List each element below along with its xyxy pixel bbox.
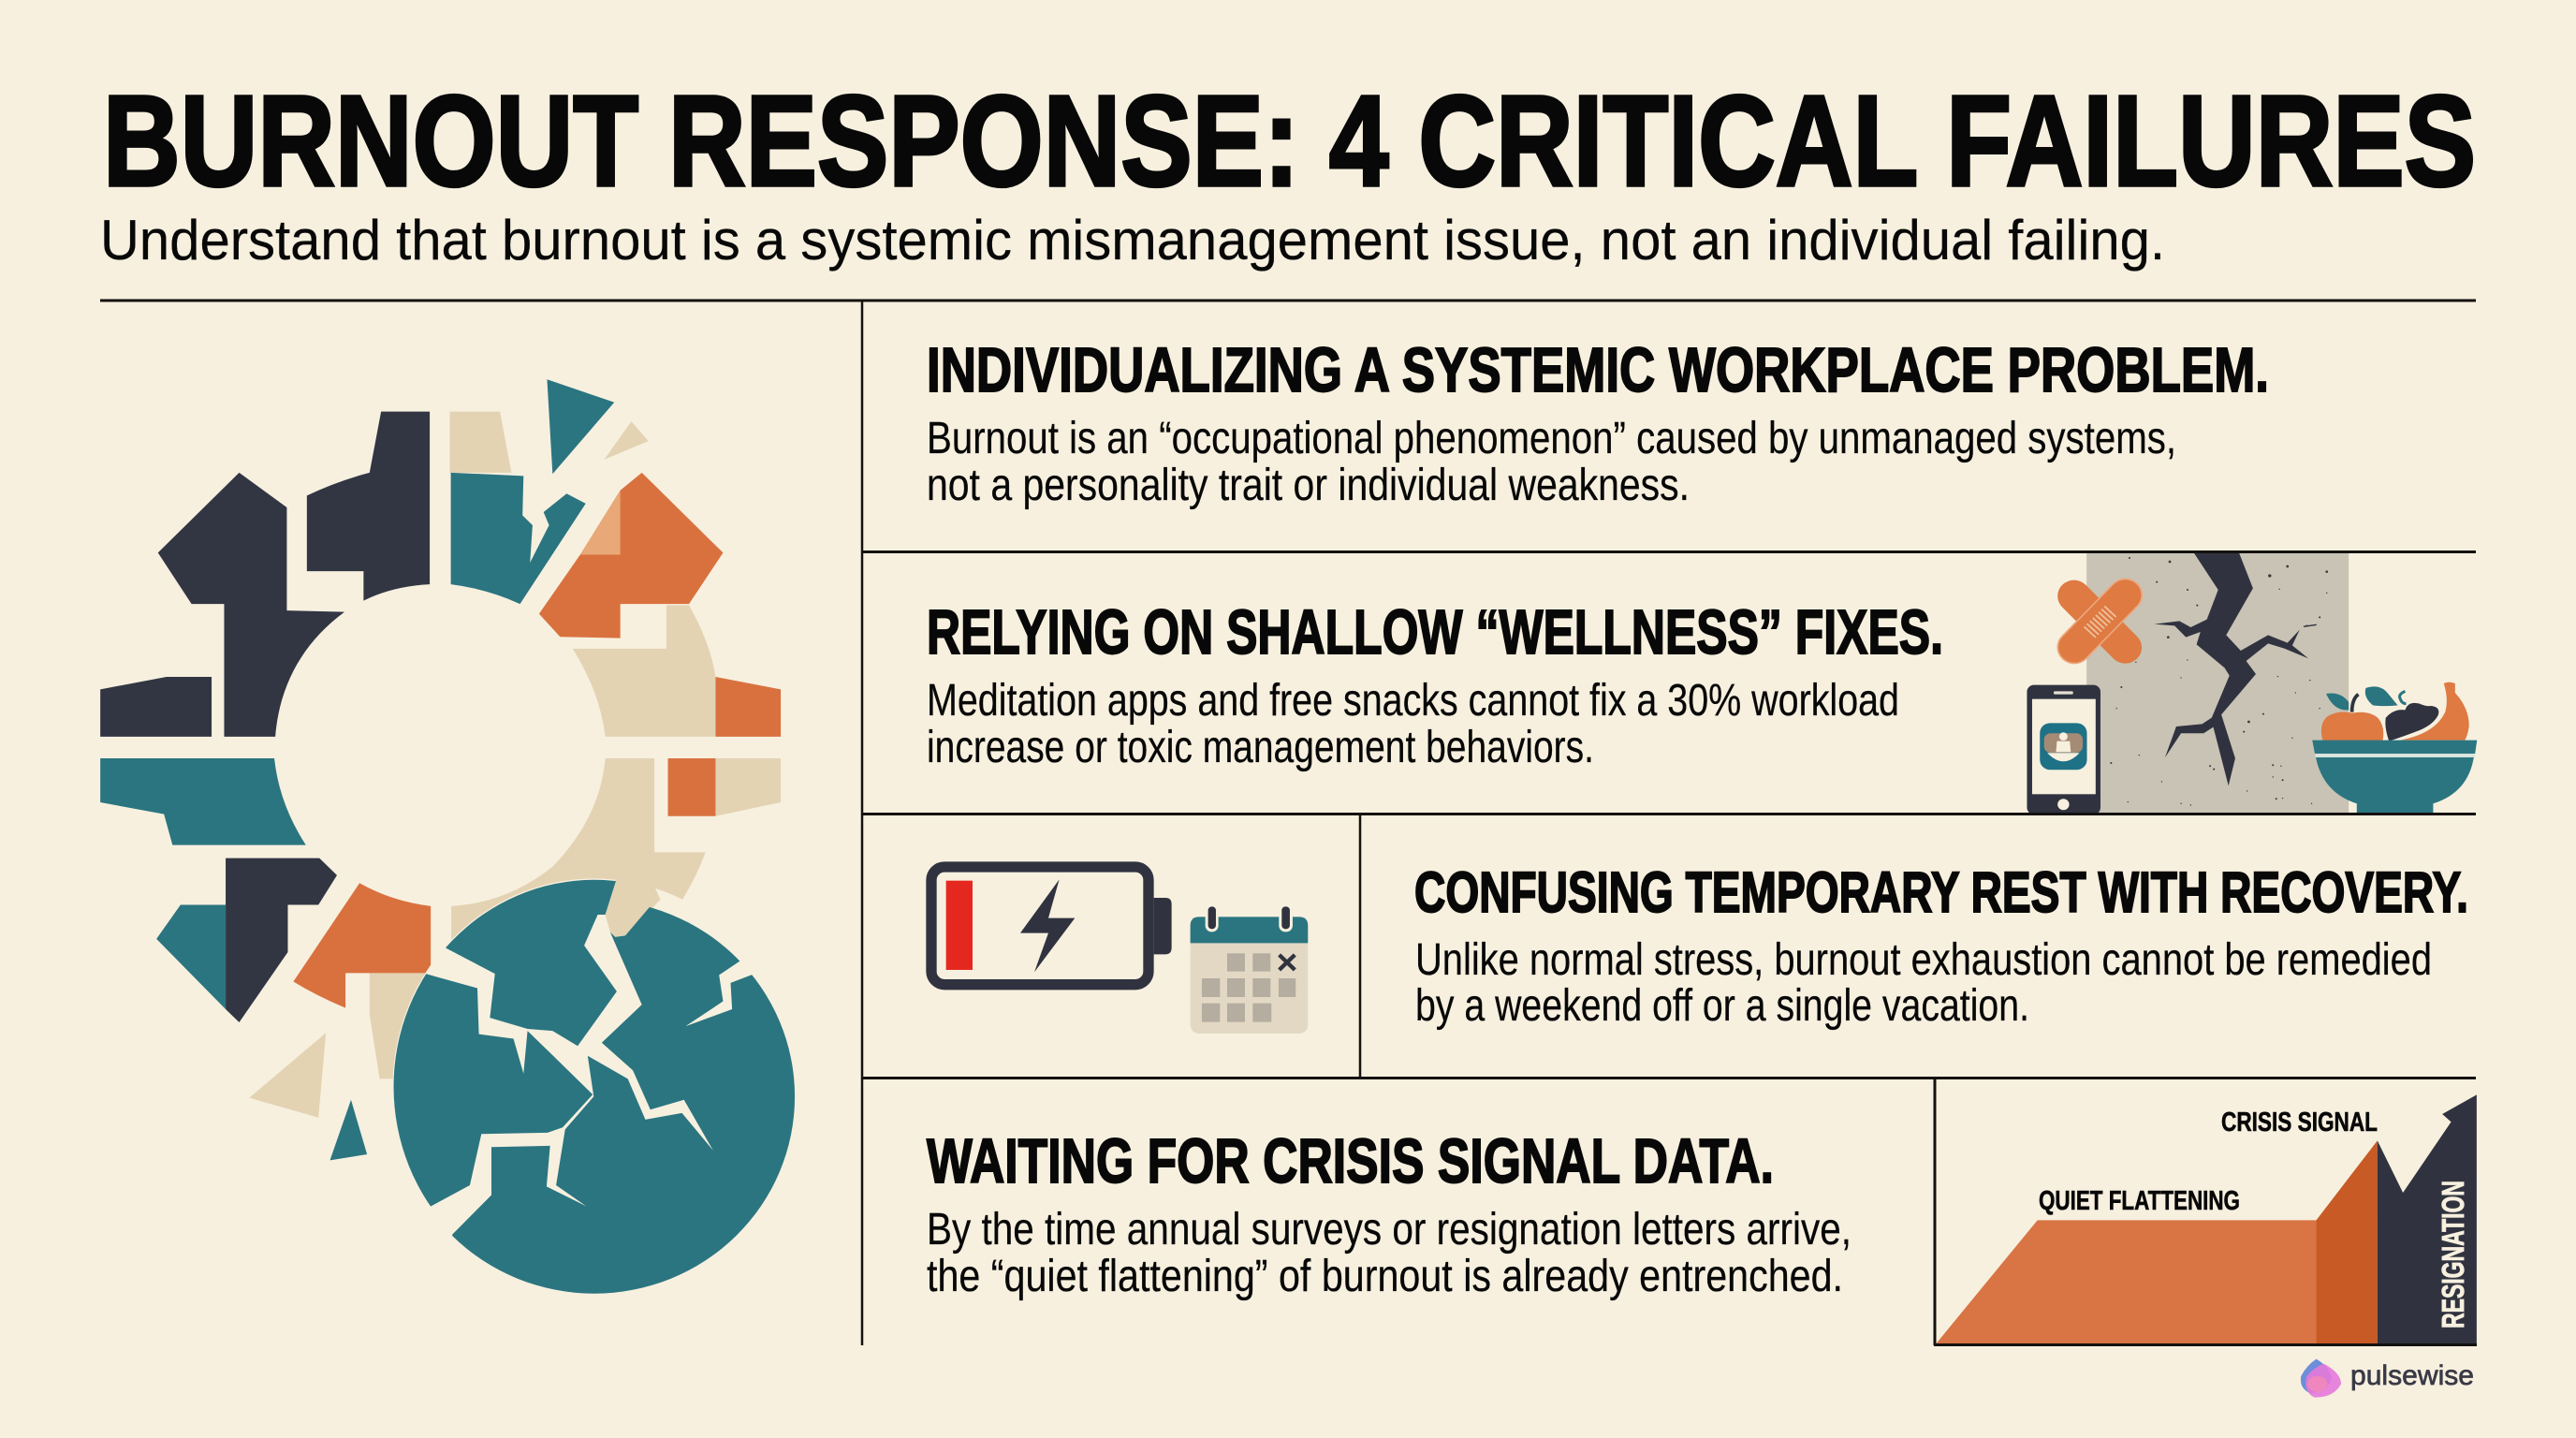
icon: phone with meditation app bbox=[2027, 685, 2100, 814]
section 4: crisis signal data bbox=[927, 1126, 1852, 1301]
heading: WAITING FOR CRISIS SIGNAL DATA. bbox=[927, 1126, 1774, 1196]
chart: crisis signal area bbox=[2317, 1140, 2378, 1343]
logo mark bbox=[2301, 1359, 2341, 1398]
chart: resignation area bbox=[2378, 1094, 2477, 1345]
beige gear fragments bbox=[249, 412, 781, 1118]
cracked concrete wall bbox=[2086, 553, 2349, 814]
orange gear fragments bbox=[293, 473, 781, 1008]
heading: INDIVIDUALIZING A SYSTEMIC WORKPLACE PROBLEM. bbox=[927, 335, 2269, 405]
icon: fruit bowl bbox=[2312, 682, 2477, 814]
navy gear fragments bbox=[100, 412, 430, 1022]
body text: Burnout is an “occupational phenomenon” caused by unmanaged systems, bbox=[927, 413, 2176, 463]
battery and calendar icons bbox=[931, 867, 1308, 1034]
heading: RELYING ON SHALLOW “WELLNESS” FIXES. bbox=[927, 597, 1943, 668]
body text bbox=[927, 413, 2176, 510]
body text: the “quiet flattening” of burnout is already entrenched. bbox=[927, 1251, 1843, 1301]
wellness illustration bbox=[2027, 553, 2477, 814]
body text bbox=[927, 1204, 1852, 1301]
logo: pulsewise bbox=[2301, 1359, 2474, 1398]
body text: Meditation apps and free snacks cannot fix a 30% workload bbox=[927, 675, 1899, 726]
body text: By the time annual surveys or resignation letters arrive, bbox=[927, 1204, 1852, 1255]
body text: increase or toxic management behaviors. bbox=[927, 722, 1594, 772]
body text bbox=[1415, 934, 2432, 1031]
cracked teal disk bbox=[393, 878, 796, 1294]
crisis chart bbox=[1937, 1094, 2477, 1345]
logo wordmark: pulsewise bbox=[2350, 1360, 2474, 1391]
illustration: shattered gear and cracked disk bbox=[100, 379, 796, 1294]
chart label: quiet flattening: QUIET FLATTENING bbox=[2039, 1186, 2240, 1216]
section 1: individualizing bbox=[927, 335, 2269, 510]
body text: not a personality trait or individual weakness. bbox=[927, 460, 1690, 510]
section 3: rest vs recovery bbox=[1414, 860, 2468, 1031]
icon: calendar bbox=[1191, 906, 1308, 1034]
icon: crossed bandages bbox=[2074, 595, 2126, 648]
chart label: crisis signal: CRISIS SIGNAL bbox=[2221, 1108, 2378, 1137]
chart label: resignation: RESIGNATION bbox=[2436, 1181, 2470, 1328]
icon: low battery bbox=[931, 867, 1172, 985]
section 2: wellness fixes bbox=[927, 597, 1943, 772]
teal gear fragments bbox=[100, 379, 614, 1160]
subtitle: Understand that burnout is a systemic mismanagement issue, not an individual failing. bbox=[100, 209, 2165, 271]
body text: by a weekend off or a single vacation. bbox=[1415, 980, 2029, 1031]
chart: quiet flattening area bbox=[1937, 1220, 2317, 1343]
body text bbox=[927, 675, 1899, 772]
